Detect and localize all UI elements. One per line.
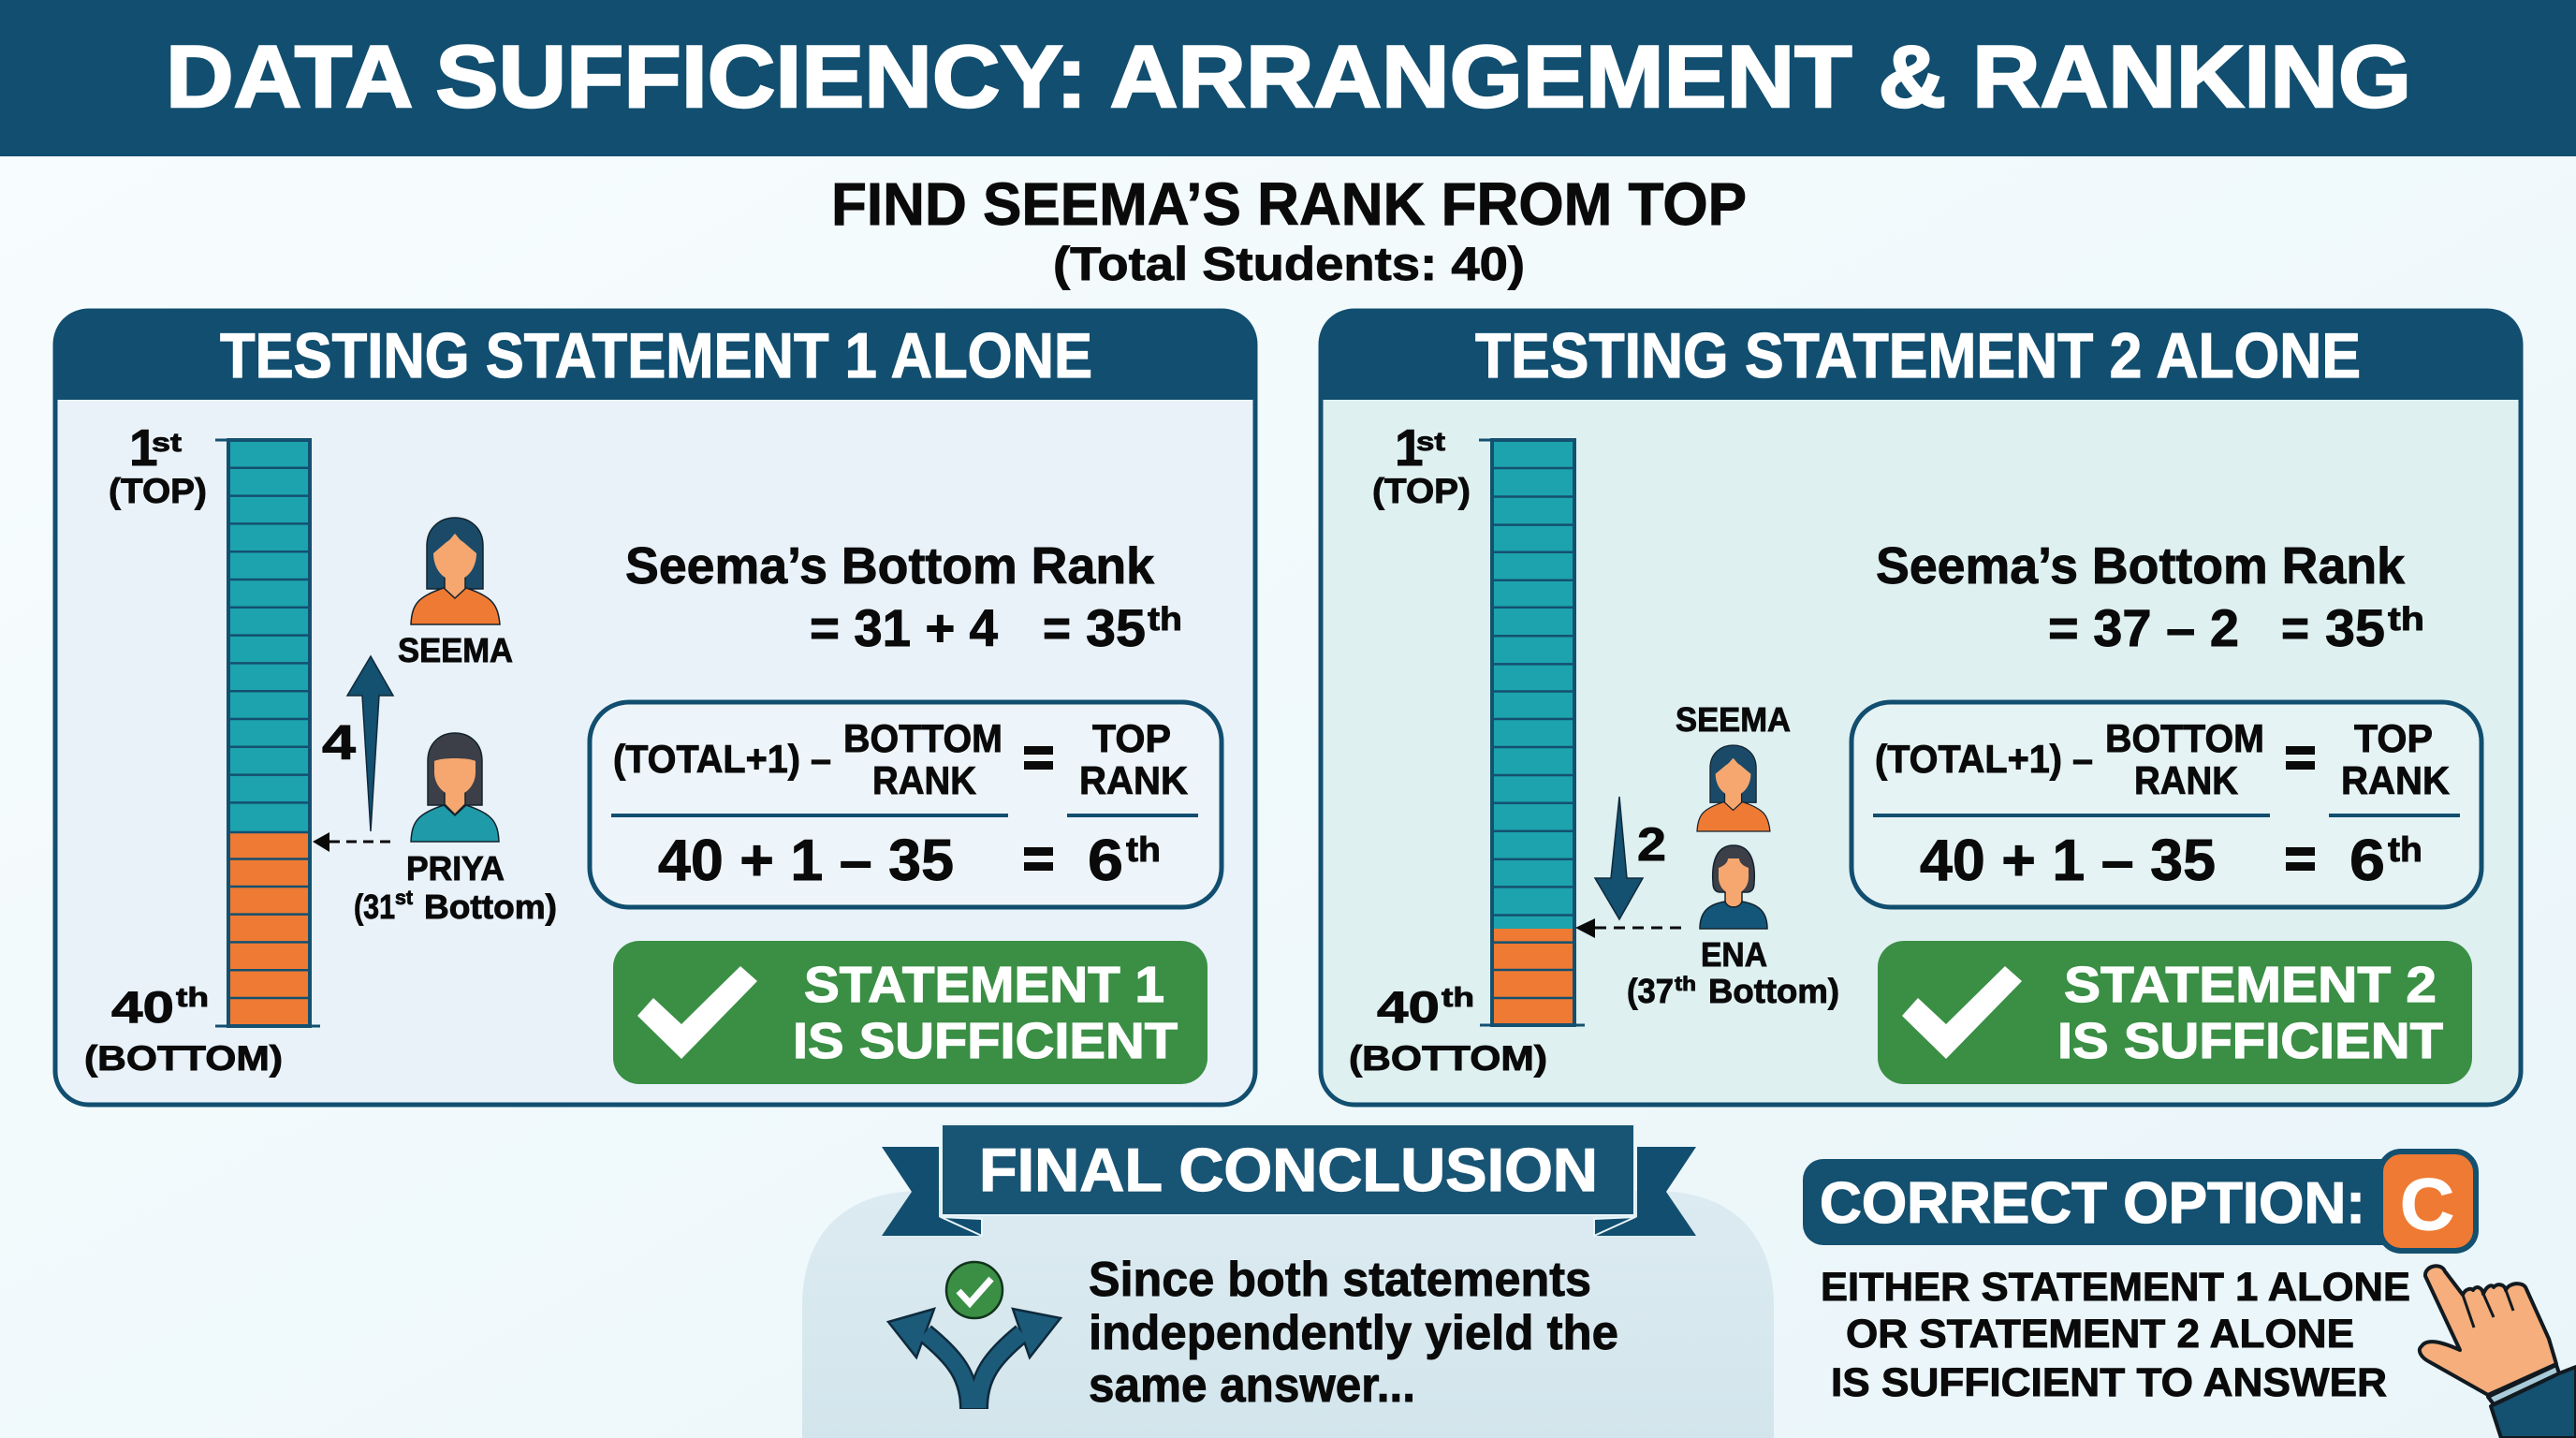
- conclusion text: Since both statements: [1089, 1253, 1591, 1307]
- conclusion text: same answer...: [1089, 1358, 1415, 1413]
- question heading: FIND SEEMA’S RANK FROM TOP: [831, 170, 1747, 238]
- answer explanation: IS SUFFICIENT TO ANSWER: [1831, 1360, 2387, 1405]
- calculation: bottom rank: Seema’s Bottom Rank: [1876, 536, 2405, 594]
- ribbon heading: [882, 1124, 1696, 1236]
- callout: statement 2 sufficient: IS SUFFICIENT: [2057, 1013, 2443, 1069]
- top rank label: 1: [1395, 418, 1424, 477]
- calculation: bottom rank: 35: [2325, 598, 2385, 657]
- answer explanation: [1821, 1265, 2410, 1405]
- formula box: th: [1126, 830, 1161, 869]
- answer explanation: OR STATEMENT 2 ALONE: [1846, 1312, 2354, 1357]
- bottom rank label: (BOTTOM): [1349, 1039, 1547, 1078]
- formula box: [1852, 702, 2481, 907]
- formula box: RANK: [1079, 758, 1188, 802]
- top rank label: 1: [129, 418, 158, 477]
- top rank label: (TOP): [109, 472, 207, 510]
- calculation: bottom rank: = 37 – 2: [2048, 598, 2239, 657]
- answer explanation: EITHER STATEMENT 1 ALONE: [1821, 1265, 2410, 1310]
- arrow: down 2 ranks: [1595, 797, 1643, 919]
- panel: testing statement 2: [1319, 309, 2523, 1105]
- correct option badge: C: [2400, 1163, 2454, 1245]
- label: Seema: SEEMA: [398, 631, 513, 669]
- icon: pointing hand: [2420, 1266, 2576, 1438]
- arrow: Priya position: [313, 832, 395, 852]
- bottom rank label: th: [1442, 983, 1474, 1013]
- icon: Ena: [1700, 845, 1767, 929]
- formula box: BOTTOM: [2105, 716, 2264, 760]
- formula box: (TOTAL+1) –: [613, 737, 831, 781]
- ribbon heading: FINAL CONCLUSION: [979, 1136, 1598, 1204]
- calculation: bottom rank: 35: [1086, 598, 1146, 657]
- top rank label: st: [1416, 427, 1445, 456]
- conclusion text: independently yield the: [1089, 1306, 1618, 1360]
- formula box: 6: [2349, 829, 2385, 893]
- callout: statement 2 sufficient: [1878, 941, 2472, 1084]
- calculation: bottom rank: = 31 + 4: [810, 598, 998, 657]
- callout: statement 1 sufficient: [613, 941, 1208, 1084]
- calculation: bottom rank: th: [1148, 601, 1182, 638]
- rank bar: 40 students: [215, 440, 320, 1026]
- panel 2 header: [1319, 309, 2523, 400]
- arrow: up 4 ranks: [347, 656, 393, 831]
- label: Ena: ENA: [1701, 935, 1767, 974]
- panel 2 header: TESTING STATEMENT 2 ALONE: [1475, 320, 2361, 391]
- label: Priya: PRIYA: [406, 849, 505, 888]
- title banner: [0, 0, 2576, 156]
- calculation: bottom rank: [1876, 536, 2424, 657]
- top rank label: [109, 418, 207, 510]
- calculation: bottom rank: Seema’s Bottom Rank: [625, 536, 1154, 594]
- formula box: th: [2388, 830, 2422, 869]
- question heading: (Total Students: 40): [1053, 238, 1525, 290]
- label: 2: 2: [1637, 818, 1666, 871]
- callout: statement 1 sufficient: STATEMENT 1: [804, 957, 1164, 1013]
- panel 1 header: TESTING STATEMENT 1 ALONE: [220, 320, 1092, 391]
- correct option badge: CORRECT OPTION:: [1820, 1171, 2365, 1236]
- bottom rank label: th: [176, 983, 209, 1013]
- panel 1 header: [53, 309, 1257, 400]
- calculation: bottom rank: [625, 536, 1182, 657]
- formula box: RANK: [2134, 758, 2238, 802]
- calculation: bottom rank: th: [2388, 601, 2424, 638]
- bottom rank label: [84, 982, 283, 1078]
- label: Priya: (31: [354, 888, 395, 926]
- label: Ena: th: [1675, 974, 1696, 995]
- label: Priya: st: [395, 888, 413, 909]
- bottom rank label: 40: [111, 982, 174, 1032]
- label: Ena: (37: [1627, 972, 1674, 1010]
- label: Priya: [354, 849, 557, 926]
- formula box: TOP: [2354, 716, 2433, 760]
- top rank label: (TOP): [1372, 472, 1471, 510]
- label: Seema: SEEMA: [1676, 700, 1791, 739]
- label: Ena: [1627, 935, 1839, 1010]
- formula box: BOTTOM: [843, 716, 1003, 760]
- arrow: Ena position: [1575, 918, 1683, 938]
- formula box: RANK: [872, 758, 976, 802]
- icon: Priya: [411, 733, 499, 842]
- bottom rank label: 40: [1377, 982, 1440, 1032]
- formula box: 40 + 1 – 35: [658, 829, 954, 893]
- formula box: 40 + 1 – 35: [1920, 829, 2216, 893]
- panel: final conclusion: [802, 1124, 1774, 1438]
- panel: testing statement 1: [53, 309, 1257, 1105]
- question heading: [831, 170, 1747, 290]
- formula box: RANK: [2341, 758, 2450, 802]
- formula box: [590, 702, 1222, 907]
- icon: Seema: [1697, 745, 1770, 831]
- formula box: TOP: [1092, 716, 1171, 760]
- label: Ena: Bottom): [1708, 972, 1839, 1010]
- bottom rank label: [1349, 982, 1547, 1078]
- icon: Seema: [411, 518, 500, 624]
- title banner: DATA SUFFICIENCY: ARRANGEMENT & RANKING: [166, 27, 2411, 125]
- callout: statement 1 sufficient: IS SUFFICIENT: [793, 1013, 1178, 1069]
- label: 4: 4: [322, 716, 356, 770]
- formula box: 6: [1088, 829, 1123, 893]
- label: Priya: Bottom): [424, 888, 557, 926]
- rank bar: 40 students: [1479, 440, 1585, 1025]
- bottom rank label: (BOTTOM): [84, 1039, 283, 1078]
- calculation: bottom rank: =: [1043, 598, 1071, 657]
- top rank label: [1372, 418, 1471, 510]
- callout: statement 2 sufficient: STATEMENT 2: [2064, 957, 2437, 1013]
- icon: forked arrows with check: [888, 1262, 1061, 1409]
- top rank label: st: [152, 428, 182, 457]
- conclusion text: [1089, 1253, 1618, 1413]
- correct option badge: [1803, 1152, 2476, 1251]
- formula box: (TOTAL+1) –: [1875, 737, 2093, 781]
- calculation: bottom rank: =: [2281, 598, 2309, 657]
